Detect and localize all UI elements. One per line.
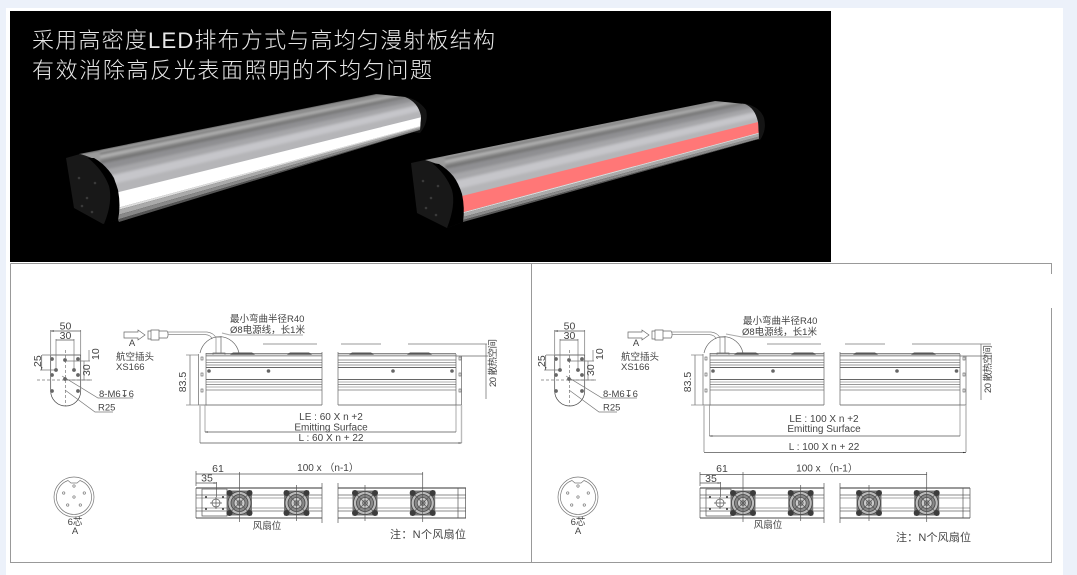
end view with mounting holes: 10 [594, 348, 606, 360]
connector pin diagram: A [72, 526, 79, 537]
connector pin diagram: 6芯 [571, 516, 586, 528]
length dimensions: Emitting Surface [294, 422, 368, 434]
end view with mounting holes: R25 [603, 402, 620, 414]
end view with mounting holes: 8-M6↧6 [603, 389, 638, 400]
end view with mounting holes: 30 [81, 364, 93, 376]
length dimensions [200, 405, 462, 444]
end view with mounting holes: 25 [32, 355, 44, 367]
end view with mounting holes: 50 [564, 320, 575, 332]
aviation plug and cable: Ø8电源线，长1米 [742, 326, 817, 338]
end view with mounting holes: 30 [585, 364, 597, 376]
aviation plug and cable: XS166 [621, 362, 650, 373]
lamp: red light [411, 89, 770, 228]
aviation plug and cable: 最小弯曲半径R40 [230, 313, 304, 325]
end view with mounting holes: 8-M6↧6 [99, 389, 134, 400]
panel: right drawing, 100 pitch [536, 315, 994, 544]
length dimensions: LE : 100 X n +2 [789, 414, 859, 425]
bottom view with fans: 风扇位 [754, 519, 783, 531]
aviation plug and cable: 最小弯曲半径R40 [743, 315, 817, 327]
connector pin diagram [558, 477, 598, 537]
connector pin diagram: A [575, 526, 582, 537]
end view with mounting holes: R25 [98, 402, 115, 414]
bottom view with fans: 风扇位 [253, 520, 282, 532]
end view with mounting holes [536, 320, 638, 414]
length dimensions: L : 100 X n + 22 [789, 442, 860, 453]
end view with mounting holes: 30 [60, 330, 71, 342]
aviation plug and cable: Ø8电源线，长1米 [230, 324, 305, 336]
aviation plug and cable: 航空插头 [116, 351, 154, 363]
bottom view with fans: 注：N个风扇位 [390, 527, 466, 541]
aviation plug and cable: XS166 [116, 362, 145, 373]
aviation plug and cable: A [129, 338, 136, 349]
length dimensions: LE : 60 X n +2 [299, 412, 363, 423]
bottom view with fans: 100 x （n-1） [297, 462, 359, 474]
front view of lamp [177, 339, 499, 405]
aviation plug and cable [116, 313, 305, 373]
bottom view with fans: 61 [716, 463, 728, 475]
bottom view with fans: 35 [201, 472, 213, 484]
front view of lamp [682, 344, 994, 405]
end view with mounting holes: 30 [564, 330, 575, 342]
end view with mounting holes: 50 [60, 320, 71, 332]
length dimensions: Emitting Surface [787, 424, 861, 435]
length dimensions: L : 60 X n + 22 [299, 433, 364, 444]
front view of lamp: 83.5 [177, 372, 189, 392]
end view with mounting holes: 10 [90, 348, 102, 360]
bottom view with fans [700, 462, 971, 544]
bottom view with fans [196, 462, 466, 541]
bottom view with fans: 100 x （n-1） [796, 462, 858, 474]
end view with mounting holes [32, 320, 134, 414]
title [32, 28, 495, 83]
panel: product photo [10, 11, 831, 262]
connector pin diagram: 6芯 [68, 516, 83, 528]
length dimensions [704, 405, 966, 453]
front view of lamp: 83.5 [682, 372, 694, 392]
panel: left drawing, 60 pitch [32, 313, 499, 541]
bottom view with fans: 注：N个风扇位 [896, 530, 971, 544]
aviation plug and cable [621, 315, 817, 373]
front view of lamp: 20 散热空间 [982, 345, 994, 393]
lamp: white light [66, 84, 427, 228]
end view with mounting holes: 25 [536, 355, 548, 367]
title: 采用高密度LED排布方式与高均匀漫射板结构 [32, 28, 495, 53]
bottom view with fans: 35 [705, 473, 717, 485]
panel frame [10, 264, 1052, 562]
aviation plug and cable: 航空插头 [621, 351, 659, 363]
title: 有效消除高反光表面照明的不均匀问题 [32, 58, 432, 83]
aviation plug and cable: A [633, 338, 640, 349]
front view of lamp: 20 散热空间 [487, 339, 499, 387]
bottom view with fans: 61 [212, 463, 224, 475]
connector pin diagram [54, 477, 94, 537]
